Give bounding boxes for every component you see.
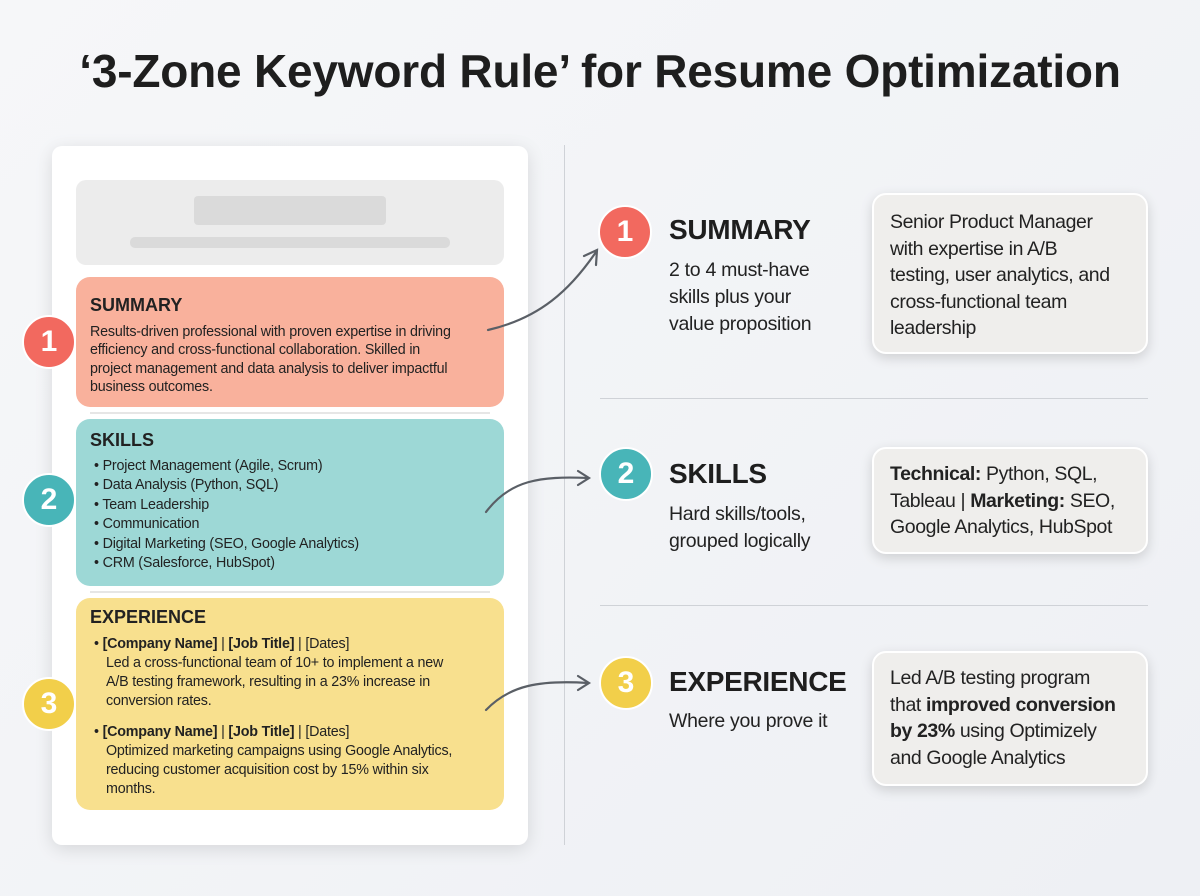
panel: experience: Led a cross-functional team of 10+ to implement a new	[106, 655, 443, 671]
section 2: skills: grouped logically	[669, 530, 810, 552]
section 1: summary: value proposition	[669, 313, 811, 335]
panel: skills: CRM (Salesforce, HubSpot)	[103, 555, 275, 571]
panel: summary: SUMMARY	[90, 295, 182, 315]
panel: experience: reducing customer acquisition cost by 15% within six	[106, 762, 429, 778]
example card 3	[872, 651, 1148, 786]
example card 3: and Google Analytics	[890, 746, 1065, 768]
vertical divider	[564, 145, 565, 845]
resume card	[52, 146, 528, 845]
section 3: experience: EXPERIENCE	[669, 666, 846, 697]
panel: skills: Digital Marketing (SEO, Google Analytics)	[103, 536, 359, 552]
example card 2: Tableau | Marketing: SEO,	[890, 490, 1115, 512]
panel: experience: [Company Name] | [Job Title] | [Dates]	[103, 724, 349, 740]
section 1: summary: 2 to 4 must-have	[669, 259, 809, 281]
panel: summary: project management and data analysis to deliver impactful	[90, 360, 447, 376]
example card 1: with expertise in A/B	[890, 238, 1057, 260]
panel: experience: [Company Name] | [Job Title] | [Dates]	[103, 636, 349, 652]
section 1: summary	[598, 205, 811, 335]
example card 3: by 23% using Optimizely	[890, 720, 1096, 742]
example card 2: Technical: Python, SQL,	[890, 463, 1097, 485]
section 2: skills	[599, 447, 810, 552]
panel: skills: Team Leadership	[102, 496, 209, 512]
example card 1: Senior Product Manager	[890, 211, 1093, 233]
section 2: skills: 2	[618, 457, 634, 490]
title: ‘3-Zone Keyword Rule’ for Resume Optimization	[79, 45, 1121, 97]
panel: experience: EXPERIENCE	[90, 607, 206, 627]
panel: summary: efficiency and cross-functional collaboration. Skilled in	[90, 342, 420, 358]
example card 1: cross-functional team	[890, 290, 1067, 312]
panel: skills: Communication	[103, 516, 199, 532]
example card 1	[872, 193, 1148, 354]
section 2: skills: SKILLS	[669, 458, 767, 489]
badge 3 left	[22, 677, 76, 731]
badge 2 left	[22, 473, 76, 527]
example card 3: that improved conversion	[890, 694, 1116, 716]
section 3: experience: 3	[618, 666, 634, 699]
panel: experience: A/B testing framework, resulting in a 23% increase in	[106, 674, 430, 690]
section 3: experience	[599, 656, 846, 732]
example card 2: Google Analytics, HubSpot	[890, 516, 1112, 538]
example card 3: Led A/B testing program	[890, 667, 1090, 689]
panel: skills	[76, 419, 504, 586]
panel: experience: conversion rates.	[106, 693, 211, 709]
panel: skills: Project Management (Agile, Scrum)	[103, 458, 322, 474]
section 3: experience: Where you prove it	[669, 710, 827, 732]
panel: experience: months.	[106, 781, 155, 797]
badge 3 left: 3	[41, 687, 57, 720]
panel: skills: Data Analysis (Python, SQL)	[103, 477, 278, 493]
example card 2	[872, 447, 1148, 554]
section 1: summary: skills plus your	[669, 286, 791, 308]
example card 1: testing, user analytics, and	[890, 264, 1110, 286]
badge 2 left: 2	[41, 483, 57, 516]
resume header placeholder	[76, 180, 504, 265]
example card 1: leadership	[890, 317, 976, 339]
panel: experience: Optimized marketing campaigns using Google Analytics,	[106, 743, 452, 759]
panel: experience	[76, 598, 504, 810]
section 1: summary: 1	[617, 215, 633, 248]
panel: skills: SKILLS	[90, 430, 154, 450]
panel: summary: business outcomes.	[90, 379, 213, 395]
section 2: skills: Hard skills/tools,	[669, 503, 806, 525]
panel: summary: Results-driven professional with proven expertise in driving	[90, 324, 451, 340]
badge 1 left: 1	[41, 325, 57, 358]
badge 1 left	[22, 315, 76, 369]
panel: summary	[76, 277, 504, 407]
section 1: summary: SUMMARY	[669, 214, 811, 245]
